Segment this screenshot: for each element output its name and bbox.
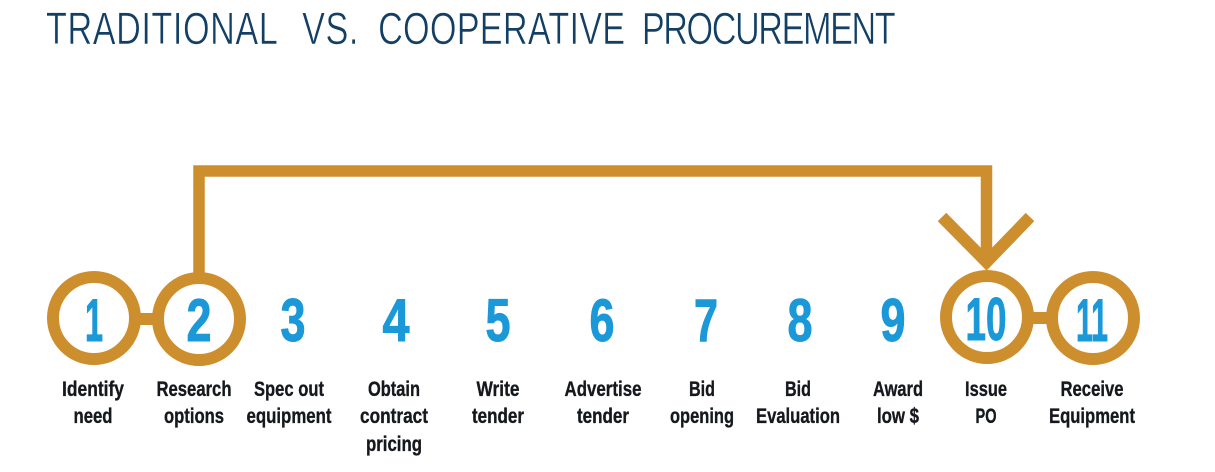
- step 4: pricing: [366, 433, 422, 456]
- step 1: need: [74, 405, 112, 428]
- step 7: 7: [694, 287, 718, 354]
- step 2: [156, 278, 240, 428]
- step 10: PO: [976, 405, 996, 428]
- connector: step 10 to 11: [1032, 312, 1048, 324]
- step 11: [1049, 277, 1135, 428]
- step 1: [53, 277, 135, 428]
- step 7: [670, 287, 734, 428]
- step 11: 11: [1076, 287, 1108, 354]
- step 6: [564, 287, 642, 428]
- step 8: Evaluation: [756, 405, 840, 428]
- title: TRADITIONAL: [46, 5, 278, 54]
- step 4: contract: [360, 405, 428, 428]
- step 3: Spec out: [254, 378, 324, 401]
- step 2: options: [164, 405, 224, 428]
- step 3: 3: [280, 287, 306, 354]
- step 8: 8: [788, 287, 812, 354]
- step 4: [360, 287, 428, 456]
- step 4: 4: [382, 287, 410, 354]
- title: VS.: [302, 5, 358, 54]
- step 9: 9: [880, 287, 906, 354]
- step 3: [246, 287, 332, 428]
- step 7: Bid: [689, 378, 715, 401]
- step 4: Obtain: [368, 378, 420, 401]
- step 10: [946, 276, 1028, 428]
- step 9: low $: [877, 405, 919, 428]
- step 1: Identify: [62, 378, 124, 401]
- step 11: Equipment: [1049, 405, 1135, 428]
- step 9: [873, 287, 923, 428]
- step 5: tender: [472, 405, 524, 428]
- title: COOPERATIVE: [378, 5, 625, 54]
- step 9: Award: [873, 378, 923, 401]
- step 5: [472, 287, 524, 428]
- step 5: Write: [476, 378, 520, 401]
- step 6: Advertise: [564, 378, 642, 401]
- title: PROCUREMENT: [642, 5, 896, 54]
- step 3: equipment: [246, 405, 332, 428]
- step 10: 10: [966, 286, 1006, 353]
- step 6: tender: [577, 405, 629, 428]
- step 8: Bid: [785, 378, 811, 401]
- step 5: 5: [486, 287, 510, 354]
- step 2: 2: [186, 287, 212, 354]
- step 6: 6: [590, 287, 614, 354]
- step 7: opening: [670, 405, 734, 428]
- connector: step 1 to 2: [139, 313, 155, 325]
- title: [46, 5, 896, 54]
- step 11: Receive: [1060, 378, 1124, 401]
- arrow: step 2 to step 10: [199, 171, 1030, 275]
- step 1: 1: [85, 287, 103, 354]
- step 2: Research: [156, 378, 232, 401]
- step 8: [756, 287, 840, 428]
- step 10: Issue: [965, 378, 1007, 401]
